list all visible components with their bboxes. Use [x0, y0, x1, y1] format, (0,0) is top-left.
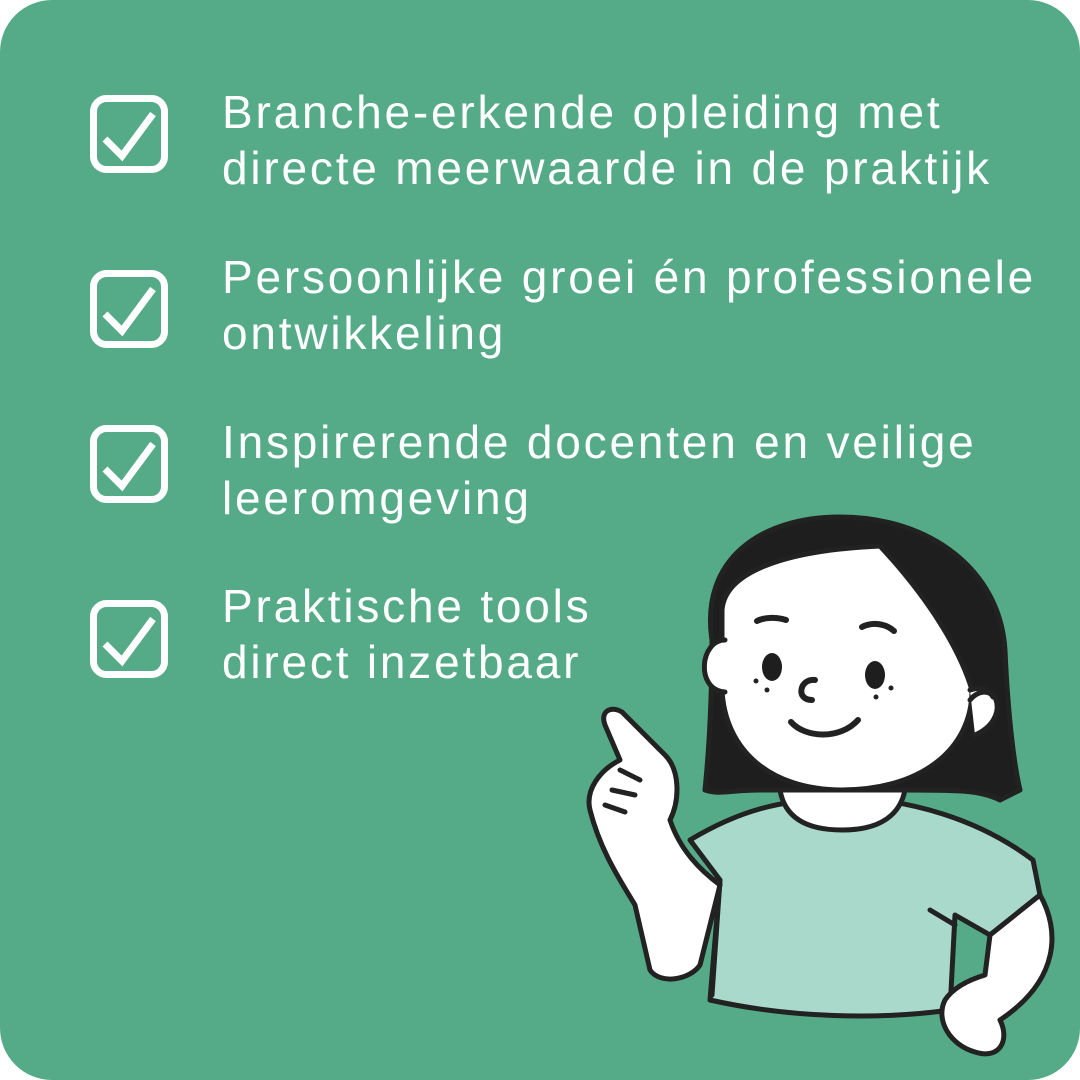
eyebrows — [757, 618, 786, 621]
icon: checkbox 4 — [90, 600, 168, 678]
smile — [791, 720, 858, 734]
text 4: direct inzetbaar — [222, 636, 581, 688]
item 3 — [90, 416, 977, 524]
icon: checkbox 2 — [90, 270, 168, 348]
text 2: Persoonlijke groei én professionele — [222, 251, 1036, 303]
icon: checkbox 3 — [90, 425, 168, 503]
text 1: directe meerwaarde in de praktijk — [222, 142, 992, 194]
icon: checkbox 1 — [90, 95, 168, 173]
text 4: Praktische tools — [222, 580, 592, 632]
text 1: Branche-erkende opleiding met — [222, 86, 942, 138]
face — [722, 546, 972, 790]
freckles — [754, 678, 894, 700]
right arm and hand — [942, 895, 1052, 1054]
left arm and hand — [589, 709, 720, 979]
shirt — [690, 798, 1040, 1016]
nose — [801, 680, 815, 700]
eyes — [762, 653, 782, 681]
text 2: ontwikkeling — [222, 307, 506, 359]
text 2 — [222, 251, 1036, 359]
text 4 — [222, 580, 592, 688]
ears — [704, 640, 725, 692]
text 1 — [222, 86, 992, 194]
item 2 — [90, 251, 1036, 359]
text 3 — [222, 416, 977, 524]
item 4 — [90, 580, 592, 688]
text 3: Inspirerende docenten en veilige — [222, 416, 977, 468]
collar / neck — [780, 790, 905, 830]
item 1 — [90, 86, 992, 194]
hair back — [705, 517, 1020, 800]
text 3: leeromgeving — [222, 472, 532, 524]
